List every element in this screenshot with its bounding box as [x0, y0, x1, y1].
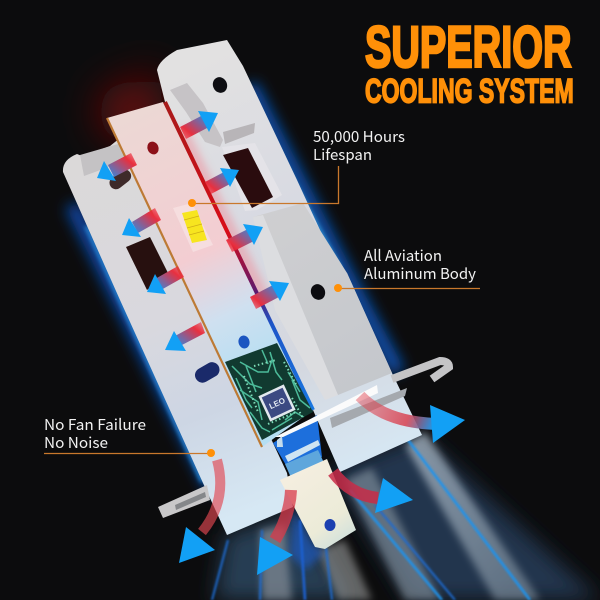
red heat glow behind top [98, 67, 166, 142]
callout: aluminum body: Aluminum Body [364, 263, 476, 284]
left window [126, 237, 168, 290]
green control circuit [225, 343, 313, 440]
callout: no fan: No Noise [44, 432, 108, 453]
title: COOLING SYSTEM [365, 73, 574, 111]
LED chip [173, 203, 213, 252]
raised front block [253, 203, 392, 400]
callout: no fan [44, 414, 215, 457]
lower left exhaust [179, 460, 220, 563]
curved exhaust arrows [179, 396, 465, 575]
cooling airflow streaks [212, 432, 600, 600]
blue socket behind terminal [273, 415, 325, 480]
title: SUPERIOR [365, 14, 572, 80]
mount hole [210, 75, 230, 95]
blue post [192, 359, 222, 385]
terminal left exhaust [257, 490, 293, 575]
blue glow beneath terminal [290, 507, 325, 570]
callout: lifespan: Lifespan [313, 144, 372, 165]
terminal right exhaust [333, 472, 413, 513]
upper recess [170, 83, 223, 147]
block hole [308, 282, 328, 302]
lower board hole [237, 334, 251, 350]
blue edge glow [72, 85, 398, 490]
title [365, 14, 574, 111]
bulb: left heat sink [63, 130, 293, 535]
circuit board panel [107, 102, 320, 447]
red post [107, 167, 134, 192]
metal terminal [280, 459, 356, 549]
mounting plate and ring [158, 361, 449, 518]
left tab [158, 485, 210, 518]
callout: aluminum body: All Aviation [364, 245, 442, 266]
board left edge [107, 118, 262, 447]
rear window [222, 143, 282, 211]
pink heat tint by board edge [178, 130, 262, 300]
top notch [80, 144, 128, 176]
right ring [392, 361, 449, 379]
callout: lifespan: 50,000 Hours [313, 126, 405, 147]
top right exhaust [360, 396, 465, 443]
bulb: right heat sink [157, 40, 422, 472]
callout: aluminum body [334, 245, 480, 292]
heat arrows left [97, 153, 205, 351]
heat arrows right [180, 111, 289, 309]
board right edge [165, 102, 313, 410]
callout: lifespan [188, 126, 405, 207]
upper ledge [223, 123, 255, 144]
top board hole [145, 140, 161, 156]
processor: LEO [268, 396, 287, 411]
callout: no fan: No Fan Failure [44, 414, 146, 435]
